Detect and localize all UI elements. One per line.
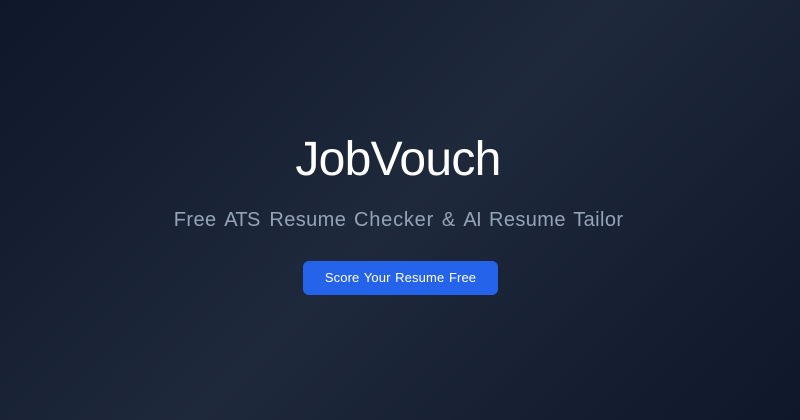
call-to-action button: Score Your Resume Free [325,270,476,285]
subtitle: Free ATS Resume Checker & AI Resume Tailor [174,209,623,231]
title: JobVouch [295,133,501,186]
call-to-action button [303,261,498,295]
